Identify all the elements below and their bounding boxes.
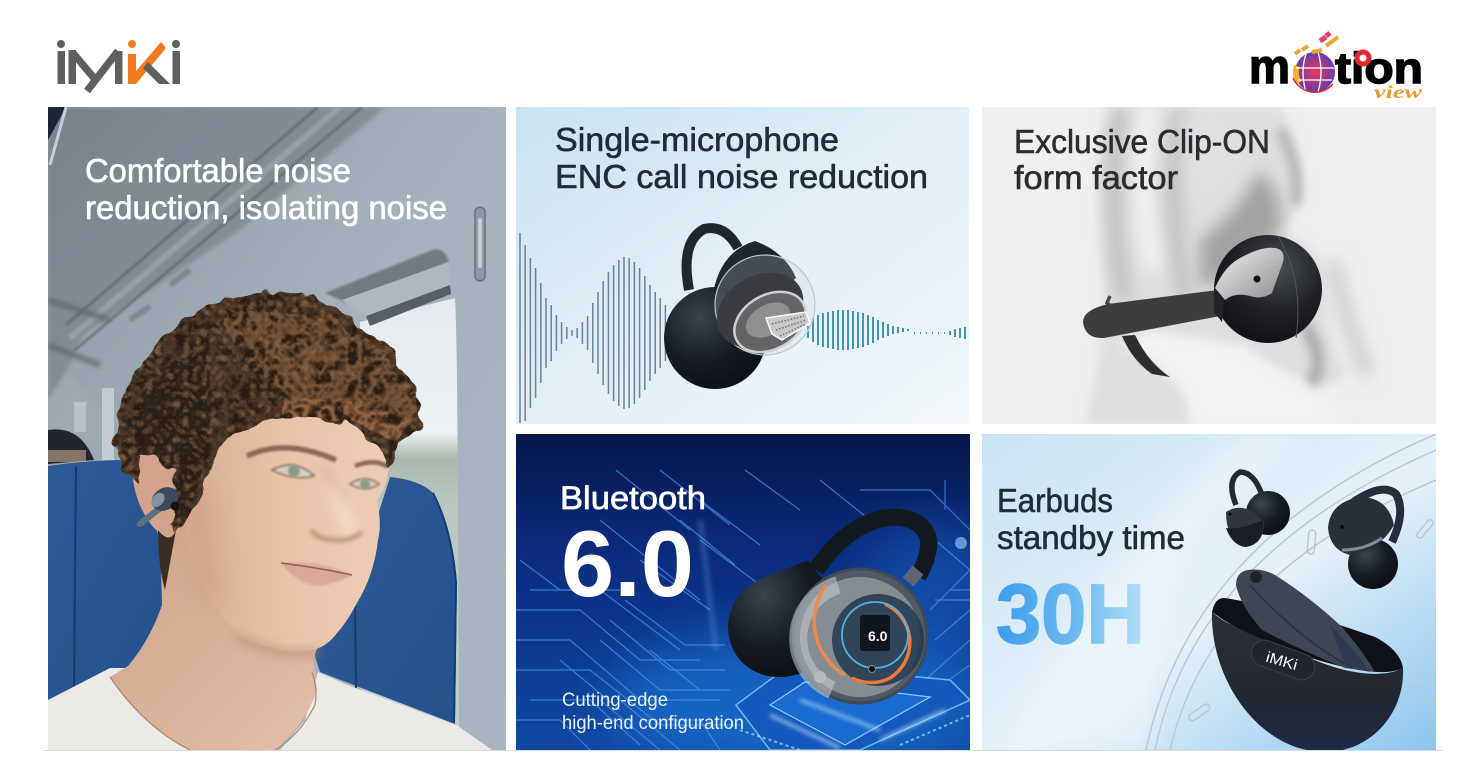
heading: form factor — [1014, 159, 1178, 196]
eyes — [272, 465, 314, 478]
heading: Single-microphone — [555, 121, 839, 158]
mouth — [281, 562, 352, 585]
face — [183, 408, 390, 653]
clock arcs — [1146, 434, 1436, 750]
background passenger — [48, 388, 114, 464]
earbud in case — [1236, 570, 1375, 672]
heading — [556, 126, 926, 188]
earbud worn — [140, 482, 183, 524]
train window — [325, 249, 459, 745]
waveform left — [520, 233, 665, 423]
t-shirt — [48, 668, 492, 750]
panel: ENC call noise reduction — [516, 107, 969, 424]
heading — [997, 482, 1185, 556]
eyebrows — [247, 448, 336, 460]
heading: Exclusive Clip-ON — [1014, 123, 1270, 160]
ear — [132, 454, 184, 537]
seat left — [48, 460, 170, 700]
circuit board lines — [516, 470, 970, 750]
sub text: high-end configuration — [562, 712, 744, 734]
sub text — [562, 689, 744, 734]
ear illustration — [1085, 107, 1368, 424]
charging case — [1212, 570, 1403, 752]
logo: iMKi — [57, 40, 180, 91]
heading: Earbuds — [997, 482, 1113, 519]
logo: motion view: tion — [1335, 44, 1423, 93]
heading — [85, 152, 447, 226]
left earbud — [1226, 472, 1290, 547]
heading: Comfortable noise — [85, 152, 351, 189]
hair — [116, 294, 422, 530]
logo: motion view — [1249, 33, 1423, 102]
case label — [1248, 636, 1318, 684]
chip — [735, 676, 970, 750]
panel: Bluetooth 6.0 — [516, 434, 970, 750]
heading — [1014, 128, 1268, 190]
right earbud — [1328, 490, 1400, 589]
train ceiling — [48, 107, 384, 396]
heading: standby time — [997, 519, 1185, 556]
heading: reduction, isolating noise — [85, 189, 447, 226]
heading: Bluetooth: Bluetooth — [560, 480, 706, 516]
clip earbud — [1083, 235, 1322, 377]
back hair below ear — [158, 530, 176, 590]
earbud with transparent shell — [728, 517, 929, 703]
big number: 6.0: 6.0 — [561, 511, 694, 616]
logo: motion view: m — [1249, 41, 1290, 94]
sub text: Cutting-edge — [562, 689, 668, 711]
earbud with transparent shell: 6.0 — [868, 628, 888, 644]
wall handle — [475, 207, 485, 281]
big number: 30H: 30H — [996, 567, 1145, 661]
waveform right — [808, 310, 965, 350]
earbud with glass cover — [664, 228, 817, 389]
case body — [1212, 612, 1403, 752]
case label: iMKi — [1264, 649, 1299, 674]
neck — [110, 530, 320, 750]
panel: train passenger wearing earbud — [48, 107, 506, 750]
heading: ENC call noise reduction — [555, 158, 928, 195]
panel: standby time — [982, 434, 1436, 752]
panel: Clip-ON form factor — [982, 107, 1436, 424]
case opening — [1212, 598, 1403, 672]
nose — [311, 530, 362, 540]
logo: motion view: view — [1374, 82, 1423, 102]
seat right — [74, 466, 457, 724]
